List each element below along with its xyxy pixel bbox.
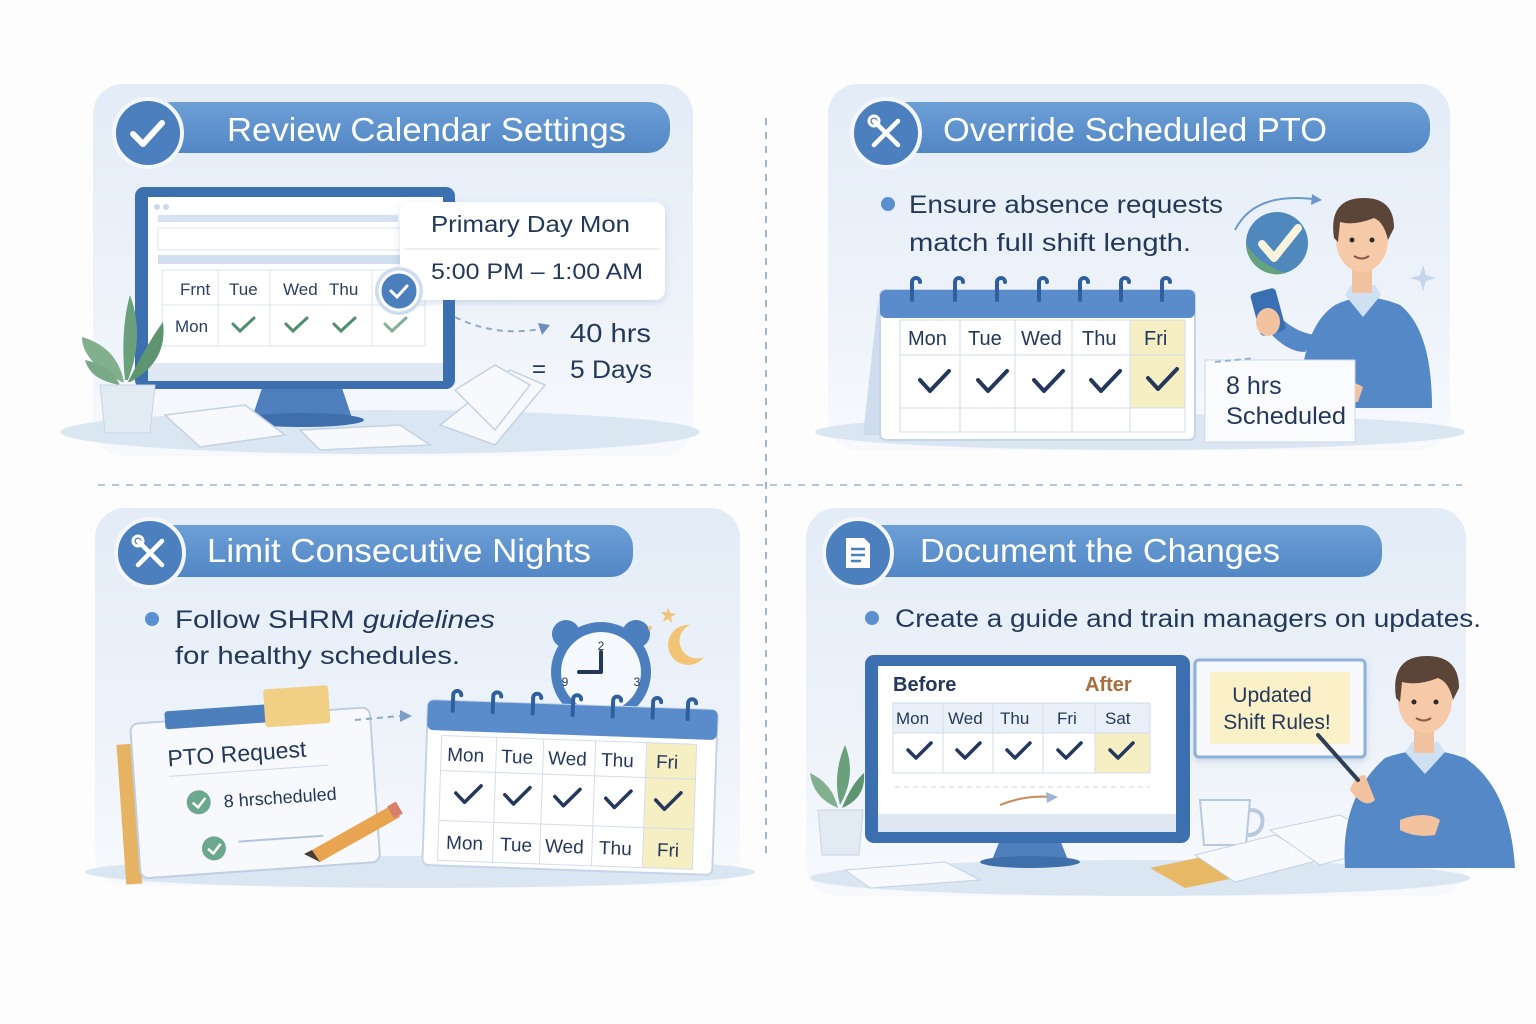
monitor: before / after: Fri: [1057, 709, 1077, 728]
bullet text: ensure absence requests: match full shift length.: [909, 229, 1191, 257]
header: limit consecutive nights: Limit Consecutive Nights: [207, 532, 591, 569]
text: 40 hrs = 5 days: 5 Days: [570, 356, 652, 384]
pto request clipboard: [113, 682, 381, 885]
monitor: before / after: Sat: [1105, 709, 1131, 728]
text: 40 hrs = 5 days: =: [532, 356, 546, 383]
monitor with calendar: Tue: [229, 280, 258, 299]
monitor: before / after: After: [1085, 674, 1132, 696]
calendar: two weeks: Mon: [446, 833, 483, 855]
panel: override scheduled pto: [815, 84, 1465, 450]
icon: coffee mug: [1200, 800, 1262, 845]
person with phone: [1250, 198, 1436, 408]
text: 40 hrs = 5 days: 40 hrs: [570, 318, 651, 348]
calendar: mon-fri checks: Wed: [1021, 328, 1062, 350]
header: review calendar settings: [114, 99, 670, 167]
bullet text: follow shrm guidelines: Follow SHRM guidelines: [175, 606, 495, 634]
monitor with calendar: Frnt: [180, 280, 210, 299]
monitor: before / after: Before: [893, 674, 956, 696]
calendar: two weeks: Thu: [601, 750, 634, 772]
icon: alarm clock: 2: [598, 639, 605, 653]
calendar: mon-fri checks: [863, 278, 1195, 440]
icon: alarm clock: [551, 620, 651, 722]
pto request clipboard: 8 hrscheduled: [223, 784, 337, 812]
calendar: two weeks: Wed: [548, 748, 587, 771]
calendar: two weeks: Tue: [501, 747, 534, 769]
note: updated shift rules: Updated: [1232, 684, 1312, 707]
monitor: before / after: Mon: [896, 709, 929, 728]
panel: review calendar settings: [60, 84, 700, 456]
header: review calendar settings: Review Calendar Settings: [227, 111, 626, 148]
monitor with calendar: Thu: [329, 280, 358, 299]
calendar: two weeks: Fri: [657, 840, 679, 862]
note: 8 hrs scheduled: [1205, 358, 1355, 442]
calendar: mon-fri checks: Fri: [1144, 328, 1167, 350]
icon: alarm clock: 3: [634, 675, 641, 689]
icon: alarm clock: 9: [562, 675, 569, 689]
icon: verified check globe: [1235, 194, 1322, 274]
header: override scheduled pto: Override Scheduled PTO: [943, 111, 1327, 148]
panel: limit consecutive nights: [85, 508, 755, 888]
calendar: two weeks: Wed: [545, 836, 584, 859]
monitor: before / after: [865, 655, 1190, 868]
bullet text: follow shrm guidelines: for healthy schedules.: [175, 642, 460, 670]
note: updated shift rules: [1195, 660, 1365, 757]
panel: document the changes: [806, 508, 1515, 896]
icon: plant: [82, 295, 164, 433]
header: override scheduled pto: [852, 99, 1430, 167]
icon: check badge: [375, 267, 423, 315]
calendar: two weeks: Fri: [656, 752, 679, 774]
note: updated shift rules: Shift Rules!: [1223, 711, 1331, 734]
person with pen: [1318, 656, 1515, 868]
popup: primary day: [400, 202, 665, 300]
calendar: mon-fri checks: Tue: [968, 328, 1002, 350]
popup: primary day: 5:00 PM – 1:00 AM: [431, 259, 643, 284]
calendar: two weeks: Tue: [500, 835, 532, 857]
monitor: before / after: Thu: [1000, 709, 1029, 728]
arrow: dashed: [455, 317, 540, 331]
calendar: two weeks: Mon: [447, 745, 484, 767]
calendar: two weeks: Thu: [599, 838, 632, 860]
icon: plant: [810, 745, 864, 855]
bullet text: create a guide: Create a guide and train managers on updates.: [895, 605, 1481, 633]
monitor with calendar: Wed: [283, 280, 318, 299]
monitor with calendar: Mon: [175, 317, 208, 336]
monitor with calendar: [135, 187, 455, 427]
text: 40 hrs = 5 days: [532, 318, 652, 384]
monitor: before / after: Wed: [948, 709, 983, 728]
popup: primary day: Primary Day Mon: [431, 211, 630, 237]
note: 8 hrs scheduled: 8 hrs: [1226, 372, 1282, 400]
header: document the changes: Document the Changes: [920, 532, 1280, 569]
icon: pencil: [304, 801, 403, 862]
note: 8 hrs scheduled: Scheduled: [1226, 403, 1346, 430]
bullet text: ensure absence requests: [881, 191, 1223, 257]
bullet text: ensure absence requests: Ensure absence requests: [909, 191, 1223, 219]
arrow: dashed to calendar: [355, 710, 412, 722]
calendar: two weeks: [422, 690, 718, 875]
header: document the changes: [824, 519, 1382, 587]
papers and folder: [845, 815, 1395, 888]
header: limit consecutive nights: [116, 519, 633, 587]
calendar: mon-fri checks: Mon: [908, 328, 947, 350]
bullet text: follow shrm guidelines: [145, 606, 495, 670]
calendar: mon-fri checks: Thu: [1082, 328, 1116, 350]
icon: moon and stars: [648, 607, 704, 665]
pto request clipboard: PTO Request: [167, 736, 308, 771]
papers: [165, 365, 545, 450]
